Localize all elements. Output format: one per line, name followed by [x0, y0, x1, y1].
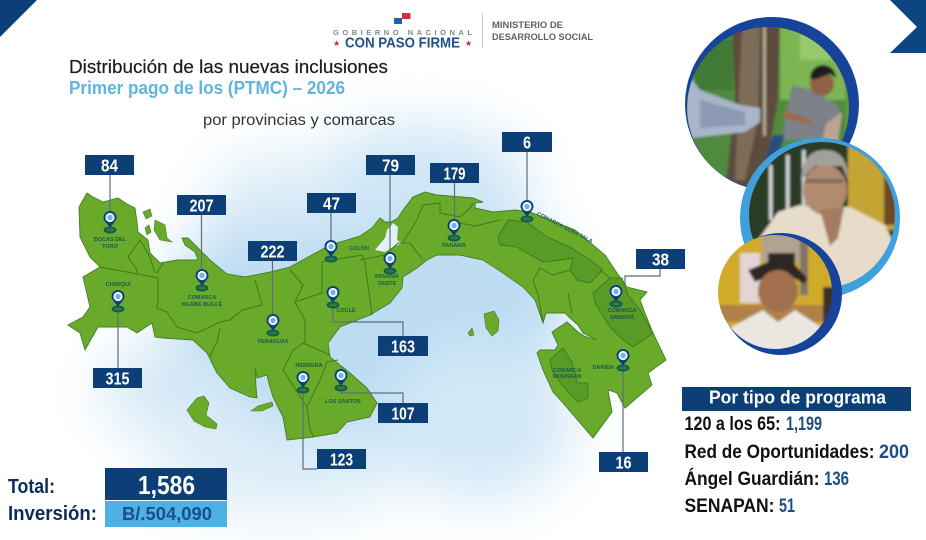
map: canal lake — [375, 223, 402, 252]
value: Veraguas — [248, 241, 297, 262]
value: total: 1,586 — [138, 470, 195, 500]
pin: Coclé — [326, 286, 356, 314]
pin: Panamá: PANAMÁ — [442, 242, 466, 249]
map: province borders — [100, 203, 610, 437]
value: Darién: 16 — [616, 452, 632, 472]
pin: Los Santos: LOS SANTOS — [325, 399, 361, 405]
value: Herrera — [317, 449, 366, 470]
value: Panamá Oeste: 79 — [382, 156, 399, 176]
program: Ángel Guardián: Ángel Guardián: — [684, 468, 820, 490]
pin: Bocas del Toro: BOCAS DEL — [94, 237, 127, 243]
icon: Panama flag — [394, 13, 410, 24]
panel heading — [682, 387, 911, 411]
value: Comarca Emberá — [636, 249, 685, 270]
pin: Panamá Oeste — [375, 252, 399, 287]
value: total — [105, 468, 227, 500]
map land — [68, 192, 666, 440]
logo text: Gobierno Nacional: GOBIERNO NACIONAL — [333, 28, 472, 37]
map islands — [143, 209, 499, 429]
panel: totals — [8, 468, 227, 527]
pin: Comarca Emberá — [608, 285, 636, 321]
heading line 1: Distribución de las nuevas inclusiones — [69, 57, 388, 77]
value: Comarca Ngäbe Buglé: 207 — [190, 196, 214, 216]
pin: Herrera — [295, 363, 323, 393]
photo: elderly man — [716, 232, 842, 357]
photos: beneficiaries — [680, 17, 900, 357]
pin: Comarca Ngäbe Buglé — [182, 269, 223, 308]
pin: Veraguas — [257, 314, 289, 345]
pin: Comarca Emberá: EMBERÁ — [610, 314, 634, 321]
value: Colón: 47 — [323, 194, 340, 214]
logo text: Con Paso Firme: CON PASO FIRME — [345, 36, 460, 52]
pin: Coclé: COCLÉ — [336, 306, 356, 314]
program: SENAPAN: 51 — [779, 496, 795, 517]
pin: Panamá Oeste: OESTE — [378, 281, 397, 287]
pin: Bocas del Toro: TORO — [102, 244, 119, 250]
value: Comarca Ngäbe Buglé — [177, 195, 226, 216]
value: Comarca Guna Yala — [502, 132, 552, 152]
background: watercolor sea — [100, 125, 575, 515]
pin: Comarca Ngäbe Buglé: NGÄBE BUGLÉ — [182, 300, 223, 308]
value: Herrera: 123 — [330, 450, 353, 470]
pin: Darién: DARIÉN — [592, 363, 614, 371]
value: Darién — [599, 452, 648, 472]
value: Comarca Emberá: 38 — [652, 250, 669, 270]
pin: Los Santos — [325, 369, 361, 405]
panel: by program type — [682, 387, 911, 517]
pin: Panamá Oeste: PANAMÁ — [375, 273, 399, 280]
value: Los Santos — [378, 403, 428, 424]
program: Red de Oportunidades: 200 — [879, 442, 909, 463]
value: Veraguas: 222 — [260, 242, 285, 262]
pin: Panamá — [442, 219, 466, 249]
icon: stars: ★ — [465, 39, 472, 48]
value: Colón — [307, 193, 356, 214]
heading line 2: Primer pago de los (PTMC) – 2026 — [69, 78, 345, 98]
icon: stars — [333, 39, 472, 48]
label: Wounaan — [552, 368, 582, 380]
logo: government and ministry — [333, 13, 593, 52]
value: inversion — [105, 501, 227, 527]
photo: fisherman — [680, 17, 859, 200]
value boxes — [85, 132, 685, 472]
value: Los Santos: 107 — [392, 404, 414, 424]
panel heading: Por tipo de programa — [709, 388, 887, 408]
program: 120 a los 65: 120 a los 65: — [684, 414, 780, 435]
logo text: ministry — [492, 20, 593, 43]
leader lines — [110, 152, 660, 469]
pin: Comarca Ngäbe Buglé: COMARCA — [188, 295, 216, 301]
value: Comarca Guna Yala: 6 — [523, 132, 531, 152]
pin: Comarca Guna Yala — [520, 200, 593, 245]
pin: Comarca Emberá: COMARCA — [608, 308, 636, 314]
pin: Comarca Guna Yala: COMARCA GUNA YALA — [535, 211, 593, 245]
photo: elderly woman — [740, 138, 900, 300]
pin: Chiriquí: CHIRIQUÍ — [106, 280, 131, 288]
title — [69, 57, 395, 129]
program: 120 a los 65: 1,199 — [786, 414, 822, 435]
icon: stars: ★ — [333, 39, 340, 48]
value: Panamá — [430, 163, 479, 184]
pin: Herrera: HERRERA — [295, 363, 323, 369]
pins and place labels — [94, 200, 636, 405]
subheading: por provincias y comarcas — [203, 112, 395, 129]
map: Panama — [68, 192, 666, 440]
map: darker comarcas — [498, 220, 653, 402]
pin: Colón — [324, 240, 369, 262]
label: total: Total: — [8, 476, 55, 498]
pin: Darién — [592, 349, 630, 371]
value: Panamá Oeste — [366, 155, 415, 176]
pin: Bocas del Toro — [94, 211, 127, 250]
label: Wounaan: COMARCA — [553, 368, 581, 374]
pin: Chiriquí — [106, 280, 131, 312]
value: Bocas del Toro — [85, 155, 134, 176]
value: Coclé — [378, 336, 428, 356]
program: Red de Oportunidades: Red de Oportunidades: — [684, 442, 874, 463]
value: Coclé: 163 — [391, 336, 415, 356]
program: Ángel Guardián: 136 — [824, 469, 849, 490]
program: SENAPAN: SENAPAN: — [684, 496, 774, 517]
corner: top right — [890, 0, 926, 53]
value: Chiriquí — [93, 368, 142, 388]
value: Bocas del Toro: 84 — [101, 156, 118, 176]
corner: top left — [0, 0, 37, 37]
pin: Veraguas: VERAGUAS — [257, 339, 289, 345]
value: inversion: B/.504,090 — [122, 504, 212, 524]
label: inversion: Inversión: — [8, 503, 97, 525]
logo text: ministry: DESARROLLO SOCIAL — [492, 32, 593, 43]
value: Panamá: 179 — [444, 164, 466, 184]
pin: Colón: COLÓN — [349, 244, 369, 252]
label: Wounaan: WOUNAAN — [552, 374, 582, 380]
value: Chiriquí: 315 — [106, 368, 130, 388]
logo text: ministry: MINISTERIO DE — [492, 20, 563, 31]
